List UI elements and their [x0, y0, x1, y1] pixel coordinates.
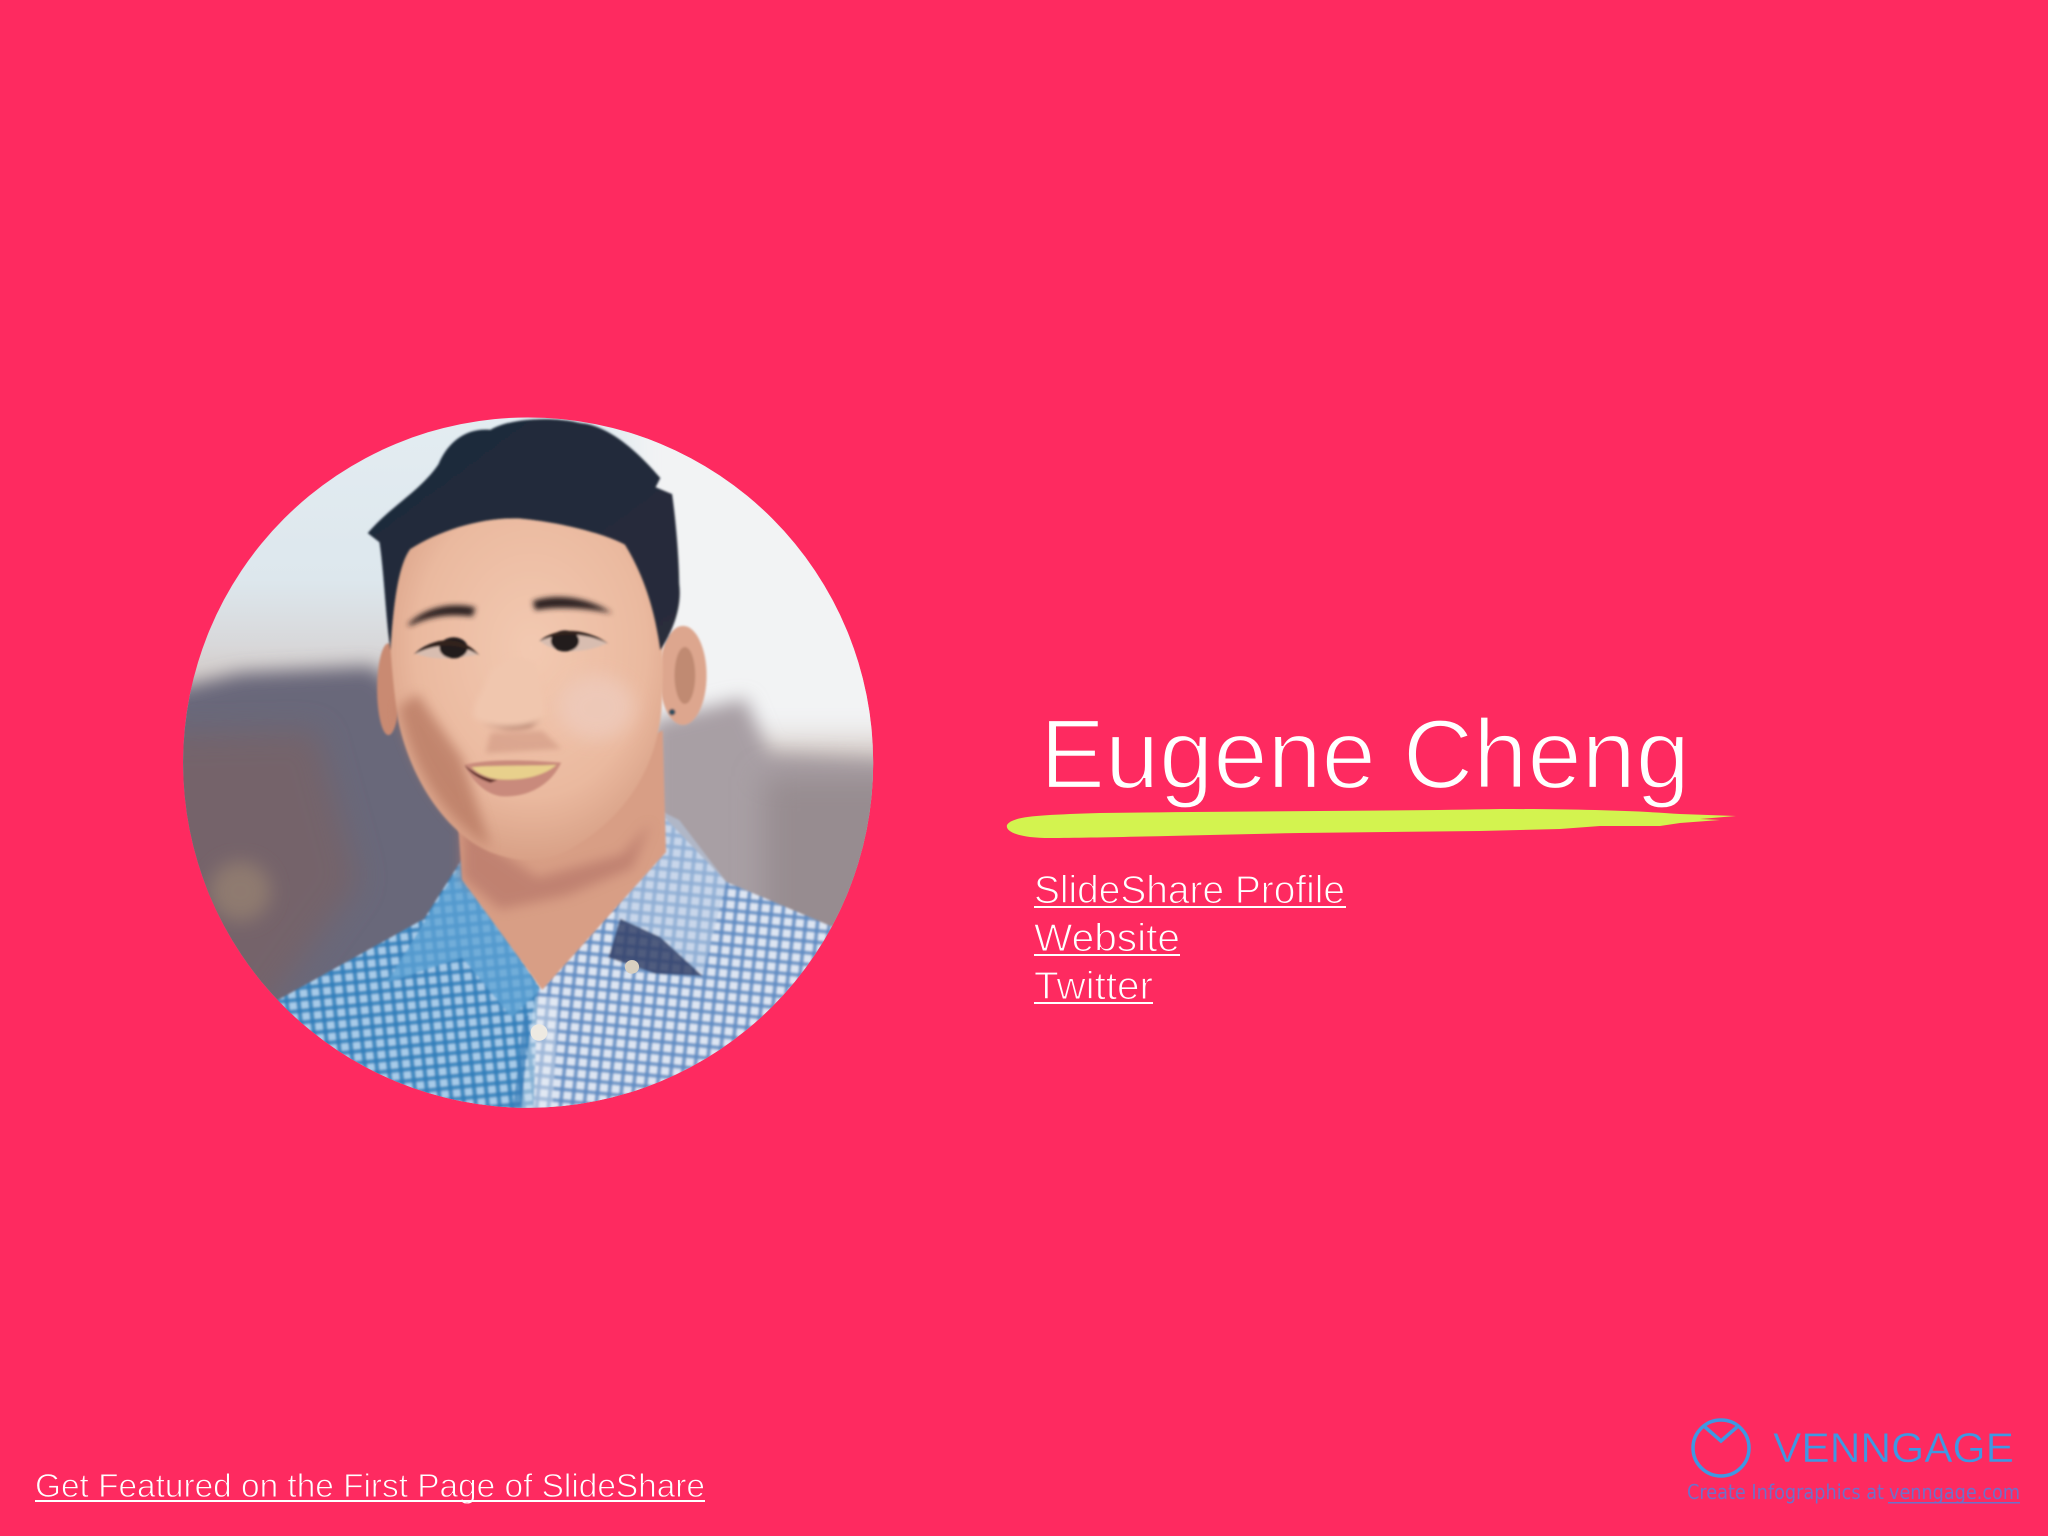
venngage credit line: venngage.com	[1889, 1480, 2020, 1504]
cheek highlight	[559, 675, 634, 740]
icon: venngage mark	[1693, 1420, 1749, 1476]
placket	[519, 997, 559, 1120]
neck shadow	[462, 822, 651, 909]
slide: author card	[35, 418, 2020, 1504]
name heading: Eugene Cheng	[1040, 699, 1690, 809]
venngage credit line: Create Infographics at	[1687, 1480, 1884, 1504]
venngage wordmark: VENNGAGE	[1773, 1424, 2014, 1471]
link: SlideShare Profile: SlideShare Profile	[1034, 869, 1345, 912]
mouth	[464, 760, 561, 796]
shirt with gingham check	[277, 813, 832, 1108]
neck	[457, 730, 666, 990]
ear left	[377, 643, 400, 735]
brush stroke underline	[1007, 809, 1736, 838]
right collar	[613, 811, 726, 974]
eyebrows	[408, 597, 612, 626]
eyes	[414, 630, 608, 659]
shirt buttons	[531, 960, 639, 1041]
venngage credit line	[1687, 1480, 2020, 1504]
left face shadow	[398, 694, 490, 848]
footer link: Get Featured on the First Page of SlideShare	[35, 1467, 705, 1504]
portrait photo	[183, 418, 874, 1108]
ear right	[659, 626, 707, 725]
link list	[1034, 869, 1346, 1008]
nose	[478, 714, 559, 754]
link: Website: Website	[1034, 917, 1180, 960]
hair	[368, 419, 680, 650]
photo background: sky and blurred buildings	[183, 418, 874, 1108]
link: Twitter: Twitter	[1034, 965, 1153, 1008]
venngage logo	[1693, 1420, 2014, 1476]
left collar	[387, 861, 540, 1017]
face	[389, 506, 663, 860]
